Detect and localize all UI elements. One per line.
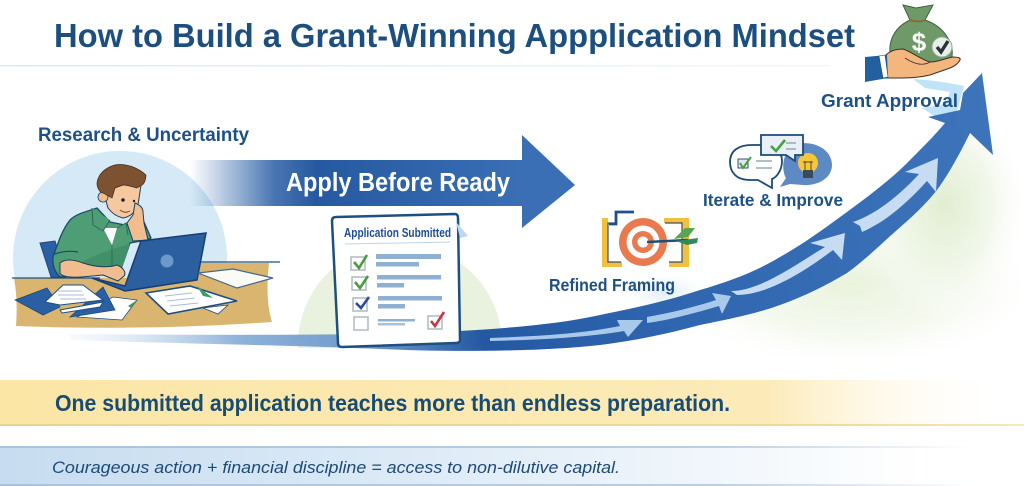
takeaway text: One submitted application teaches more than endless preparation. xyxy=(55,390,730,416)
equation text: Courageous action + financial discipline = access to non-dilutive capital. xyxy=(52,458,620,477)
label: iterate and improve: Iterate & Improve xyxy=(703,190,843,210)
label: refined framing: Refined Framing xyxy=(549,275,675,295)
growth chevron 2 xyxy=(647,293,731,323)
pale green circle behind checklist xyxy=(298,262,500,348)
growth chevron 4 xyxy=(853,158,938,232)
card heading: Application Submitted xyxy=(344,226,451,240)
arrow: apply before ready xyxy=(190,135,575,228)
checklist card: application submitted xyxy=(332,214,468,347)
checklist rows xyxy=(351,254,444,330)
arrow label: Apply Before Ready xyxy=(286,169,511,197)
label: grant approval: Grant Approval xyxy=(821,90,958,111)
title: How to Build a Grant-Winning Appplication Mindset xyxy=(54,17,855,54)
icon: speech bubbles with lightbulb xyxy=(730,135,832,188)
icon: target with dart xyxy=(602,212,698,267)
banner: closing equation xyxy=(0,446,1024,486)
growth chevron 1 xyxy=(490,320,643,341)
icon: hand holding money bag xyxy=(865,5,960,82)
growth chevron 3 xyxy=(731,233,845,295)
label: research and uncertainty: Research & Uncertainty xyxy=(38,125,249,146)
illustration: person at laptop on desk xyxy=(12,151,280,328)
banner: key takeaway xyxy=(0,380,1024,426)
icon: hand holding money bag: $ xyxy=(912,27,927,57)
light blue glow behind grant approval xyxy=(913,79,964,117)
swoosh growth arrow xyxy=(70,73,993,351)
